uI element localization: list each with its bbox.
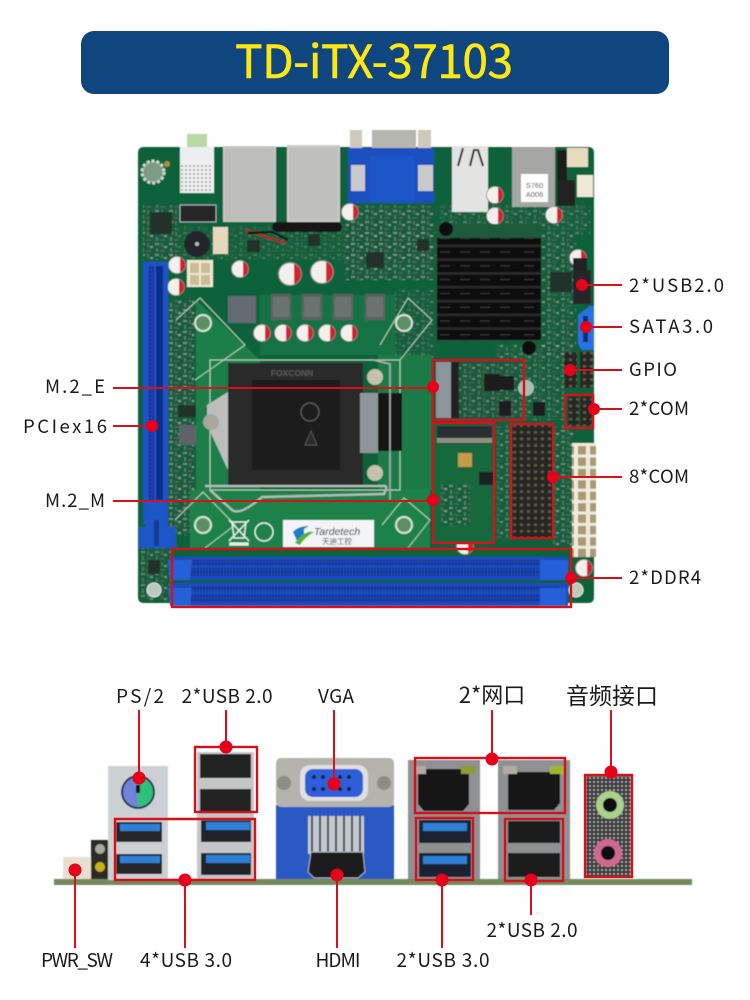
callout: 4*USB 3.0: 4*USB 3.0: [140, 946, 232, 973]
chips: [148, 212, 572, 574]
callout: HDMI: HDMI: [316, 946, 360, 973]
4-pin power connector: [187, 260, 213, 287]
HDMI shield with label: A006: [526, 190, 543, 199]
callout: 音频接口: 音频接口: [566, 677, 658, 711]
LAN and USB stack 1: [408, 760, 480, 879]
title banner: [81, 26, 669, 94]
CPU socket: FOXCONN: [271, 368, 313, 378]
8-COM pin block: [512, 425, 553, 538]
callout: 2*USB 2.0: 2*USB 2.0: [182, 682, 272, 709]
callout: HDMI: [316, 868, 360, 973]
HDMI shield with label: [512, 147, 555, 207]
callout: 音频接口: [566, 677, 658, 778]
callout: 2*网口: 2*网口: [459, 678, 525, 710]
title banner: TD-iTX-37103: [235, 26, 513, 92]
mounting diamonds: [175, 298, 432, 548]
highlight box: 2*DDR4: [172, 549, 571, 607]
audio jack top: [187, 134, 207, 149]
callout: SATA3.0: SATA3.0: [629, 313, 713, 339]
M.2 E area: [434, 361, 545, 420]
callout: SATA3.0: [580, 313, 713, 339]
callout: M.2_E: [45, 373, 439, 399]
mounting holes: [195, 315, 412, 533]
callout: PCIex16: [23, 413, 158, 439]
white 3-pin connector: [213, 227, 228, 254]
callout: M.2_M: M.2_M: [45, 487, 105, 513]
callout: GPIO: GPIO: [629, 356, 677, 382]
callout: 2*COM: [588, 395, 689, 421]
callout: rear 2*USB 2.0 lower: 2*USB 2.0: [486, 916, 578, 943]
DDR4 slot 2: [168, 583, 568, 606]
callout: 2*USB2.0: 2*USB2.0: [629, 272, 724, 298]
highlight box: audio: [585, 775, 632, 877]
callout: rear 2*USB 3.0: 2*USB 3.0: [396, 946, 490, 973]
ATX 24-pin connector: [572, 443, 596, 557]
USB 3.0 pair left: [116, 822, 162, 874]
Tardetech logo label: Tardetech: [314, 526, 360, 538]
Tardetech logo label: 天迪工控: [322, 536, 352, 547]
small white connectors: [557, 148, 593, 206]
highlight box: 2*COM: [565, 395, 593, 428]
callout: PWR_SW: PWR_SW: [41, 946, 113, 973]
VGA connector top: [348, 130, 434, 203]
callout: 2*COM: 2*COM: [629, 395, 689, 421]
CPU area light green: [196, 300, 260, 500]
white header shield: [180, 147, 214, 193]
battery and wire: [246, 222, 342, 243]
highlight box: USB 2.0 pair: [505, 819, 563, 881]
recycle marks: [229, 520, 273, 545]
callout: 2*USB2.0: [576, 272, 724, 298]
callout: 8*COM: 8*COM: [629, 463, 689, 489]
Tardetech logo label: [283, 520, 374, 547]
rear I/O panel: [54, 752, 692, 885]
LAN shield 2: [287, 145, 340, 222]
CPU heatsink: [436, 222, 542, 355]
VGA and HDMI stack: [276, 758, 394, 879]
highlight box: M.2 E: [433, 360, 524, 420]
callout: 2*网口: [459, 678, 525, 766]
corner standoff: [569, 583, 583, 597]
highlight box: 8*COM: [511, 424, 553, 538]
inductors: [228, 294, 385, 323]
callout: PWR_SW: [41, 864, 113, 973]
callout: VGA: VGA: [318, 682, 354, 709]
DDR4 slot 1: [168, 557, 568, 580]
callout: M.2_E: M.2_E: [45, 373, 105, 399]
SATA port: [578, 306, 594, 350]
PCB base: [138, 147, 594, 603]
PS/2 shield: [108, 766, 168, 880]
callout: 2*DDR4: [565, 564, 701, 590]
component speckle zones: [140, 205, 590, 600]
callout: VGA: [318, 682, 354, 790]
callout: rear 2*USB 2.0 lower: [486, 874, 578, 943]
HDMI shield with label: S760: [526, 181, 543, 190]
highlight box: rear 4*USB 3.0: [115, 819, 255, 880]
board corner fiducial: [142, 161, 170, 183]
black pin header: [180, 205, 216, 222]
capacitors: [168, 186, 593, 576]
callout: GPIO: [564, 356, 677, 382]
LAN shield 1: [223, 146, 276, 222]
callout: PS/2: [116, 682, 164, 784]
callout: PS/2: PS/2: [116, 682, 164, 709]
callout: 2*DDR4: 2*DDR4: [629, 564, 701, 590]
callout: PCIex16: PCIex16: [23, 413, 107, 439]
highlight box: M.2 M: [433, 423, 494, 543]
headers right: [564, 258, 593, 426]
callout: rear 2*USB 3.0: [396, 874, 490, 973]
M.2 M area: [434, 424, 495, 544]
buzzer: [184, 231, 210, 257]
callout: 2*USB 2.0: [182, 682, 272, 754]
highlight box: rear 2*USB 2.0: [195, 747, 257, 812]
LAN and USB stack 2: [498, 760, 570, 879]
CPU socket: [203, 360, 402, 511]
board edge strip: [54, 879, 692, 885]
PWR connector: [63, 840, 111, 879]
audio jacks: [586, 776, 631, 877]
PCIe x16 slot: [139, 262, 176, 548]
callout: M.2_M: [45, 487, 439, 513]
USB shield: [452, 146, 488, 212]
callout: 4*USB 3.0: [140, 874, 232, 973]
motherboard photo: [138, 130, 596, 606]
callout: 8*COM: [547, 463, 689, 489]
highlight box: rear 2* network: [415, 758, 565, 813]
USB stack: [197, 752, 254, 880]
highlight box: USB 3.0 pair: [416, 818, 473, 880]
